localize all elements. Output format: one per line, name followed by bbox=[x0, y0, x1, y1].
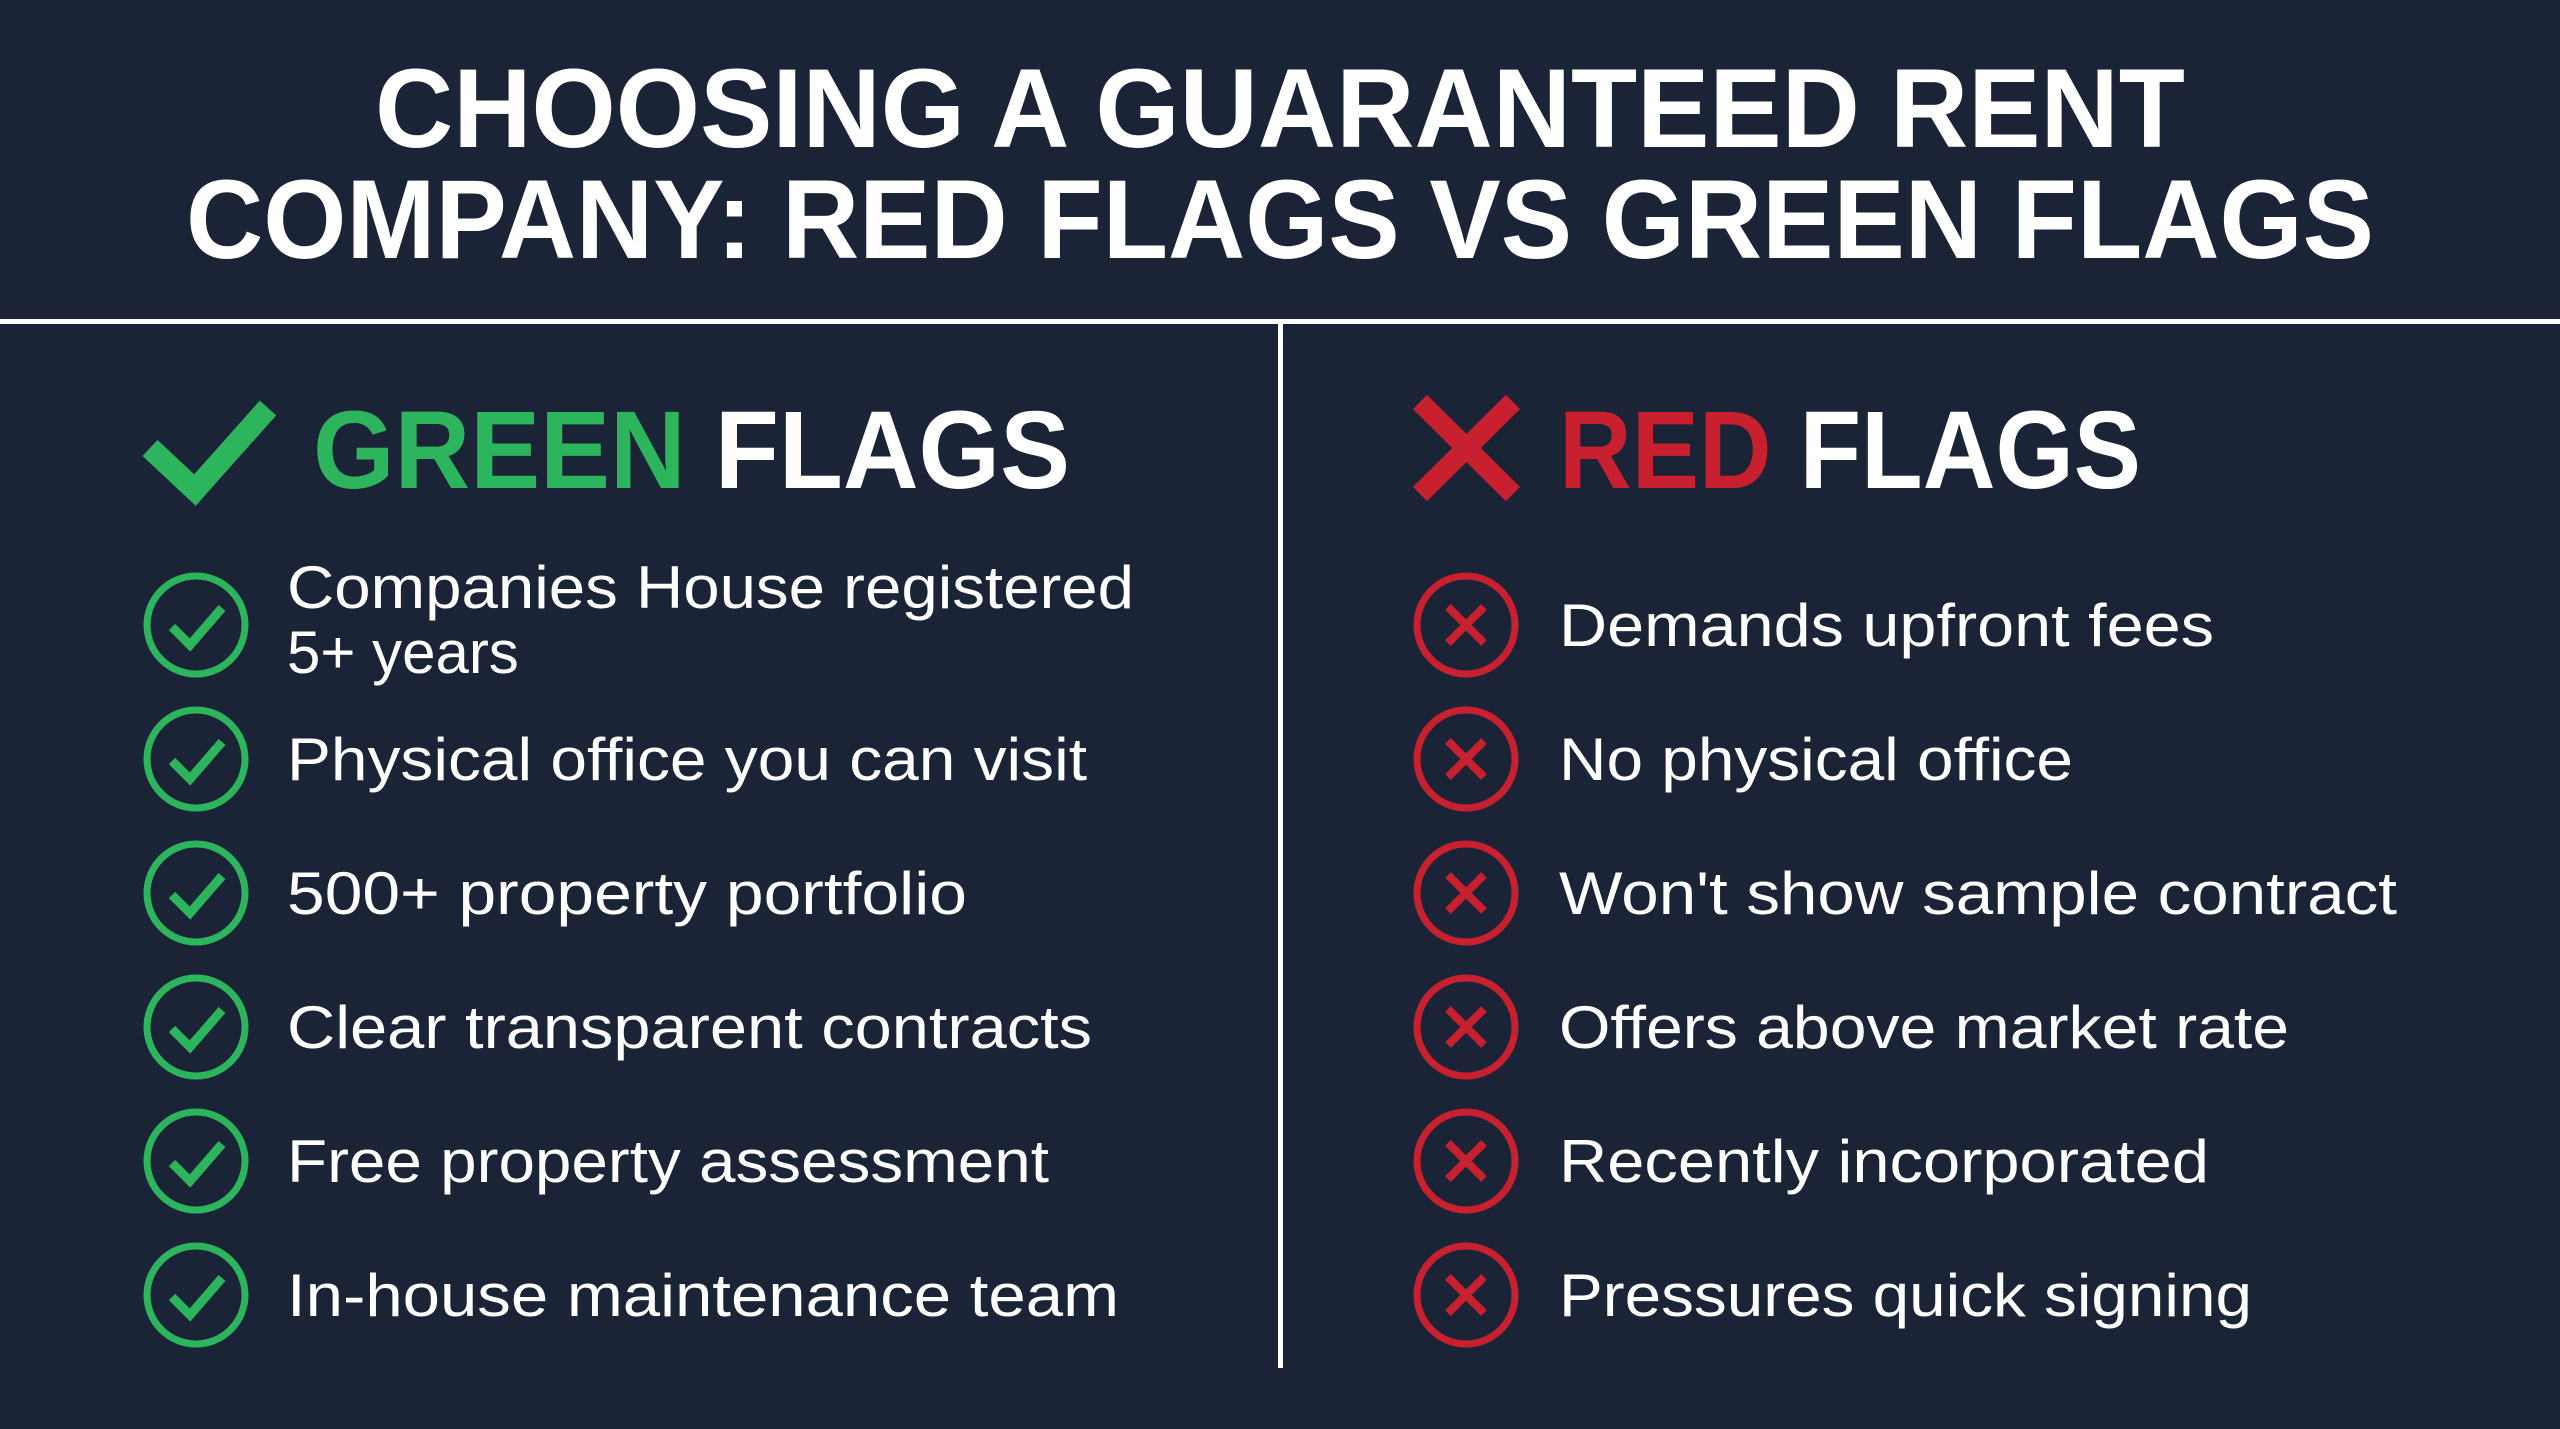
panel: red flags: Pressures quick signing bbox=[1559, 1262, 2252, 1329]
panel: red flags: Offers above market rate bbox=[1559, 994, 2289, 1061]
panel: red flags: No physical office bbox=[1559, 726, 2073, 793]
panel: green flags: Free property assessment bbox=[287, 1128, 1049, 1195]
panel: green flags: Companies House registered bbox=[287, 554, 1134, 621]
panel: red flags bbox=[1417, 389, 2397, 1344]
red heading: RED FLAGS bbox=[1559, 389, 2141, 512]
green heading: GREEN FLAGS bbox=[313, 389, 1070, 512]
panel: green flags: Clear transparent contracts bbox=[287, 994, 1092, 1061]
panel: green flags: 5+ years bbox=[287, 619, 519, 686]
green items bbox=[147, 576, 245, 1344]
panel: red flags: Demands upfront fees bbox=[1559, 592, 2214, 659]
panel: green flags bbox=[147, 389, 1134, 1344]
panel: red flags: Won't show sample contract bbox=[1559, 860, 2397, 927]
panel: green flags: Physical office you can visit bbox=[287, 726, 1087, 793]
title: CHOOSING A GUARANTEED RENT bbox=[375, 46, 2185, 171]
icon: big check bbox=[150, 408, 268, 490]
panel: green flags: 500+ property portfolio bbox=[287, 860, 967, 927]
icon: big X bbox=[1420, 402, 1513, 494]
title bbox=[186, 46, 2374, 282]
red items bbox=[1417, 576, 1515, 1344]
panel: green flags: In-house maintenance team bbox=[287, 1262, 1119, 1329]
panel: red flags: Recently incorporated bbox=[1559, 1128, 2209, 1195]
title: COMPANY: RED FLAGS VS GREEN FLAGS bbox=[186, 157, 2374, 282]
